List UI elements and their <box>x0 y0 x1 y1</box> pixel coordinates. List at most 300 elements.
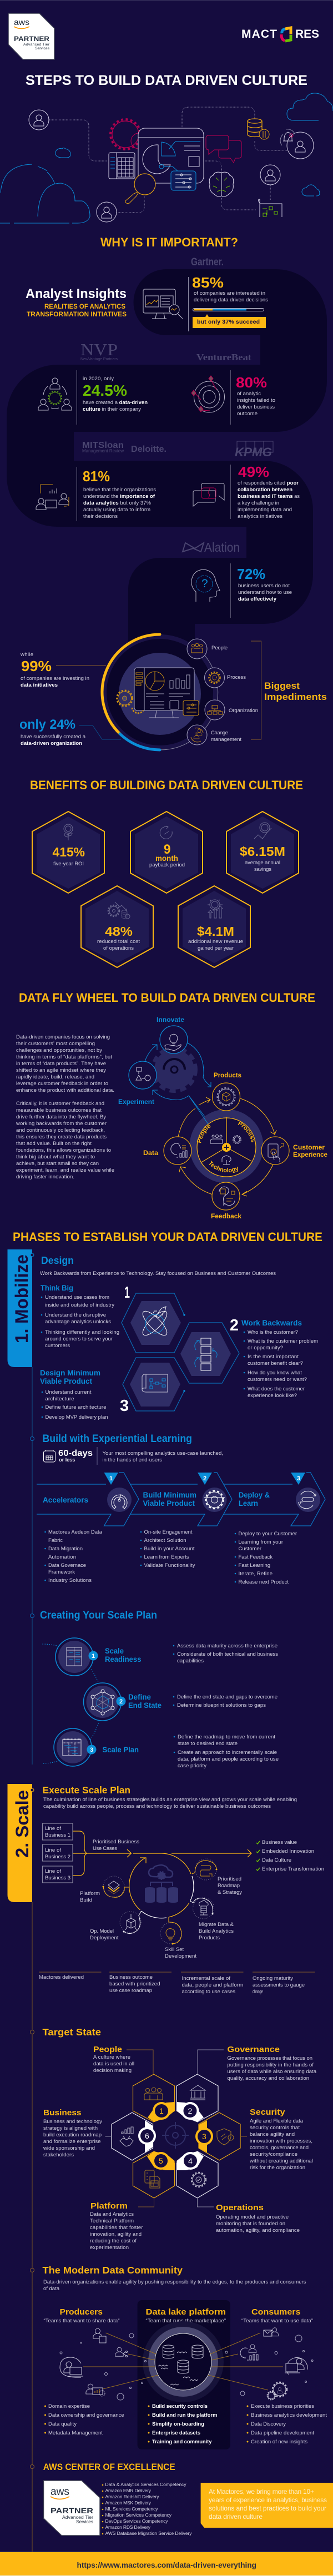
section heading: phases: PHASES TO ESTABLISH YOUR DATA DRIVEN CULTURE <box>13 1230 322 1244</box>
node: customer experience: Customer <box>293 1145 325 1151</box>
consumers column: Business analytics development <box>251 2412 327 2418</box>
work backwards list: Work Backwards <box>241 1319 302 1327</box>
modern data community heading: The Modern Data Community <box>42 2265 183 2276</box>
step 3: scale plan: Create an approach to incrementally scale <box>178 1750 277 1756</box>
icon: analytics monitor <box>134 668 194 718</box>
work backwards list: How do you know what <box>248 1370 302 1376</box>
deliverables row: Incremental scale of <box>182 1975 230 1982</box>
node: op model <box>90 1911 141 1941</box>
producers column: Domain expertise <box>48 2403 90 2409</box>
stat: 80% VentureBeat: deliver business <box>237 404 275 410</box>
node: experiment: Experiment <box>118 1099 154 1106</box>
consumers column: “Teams that want to use data” <box>241 2318 313 2324</box>
accelerators list: Industry Solutions <box>48 1577 92 1584</box>
design heading: Work Backwards from Experience to Technology. Stay focused on Business and Customer Outcomes <box>40 1271 276 1277</box>
step 3: scale plan: state to desired end state <box>178 1741 238 1747</box>
consumers column: Creation of new insights <box>251 2439 307 2445</box>
biggest impediments label: Impediments <box>264 692 327 702</box>
consumers column: Execute business priorities <box>251 2403 314 2409</box>
callout: Mactores experience: years of experience in analytics, business <box>209 2496 327 2504</box>
execute scale plan diagram <box>42 1823 324 1959</box>
benefit: $4.1M revenue <box>178 886 250 967</box>
data lake platform panel: Build security controls <box>152 2403 208 2409</box>
timeline rail: mobilize <box>30 1367 34 1765</box>
stat: 72% Alation: 72% <box>237 566 265 582</box>
fly wheel description text: measurable business outcomes that <box>16 1107 102 1113</box>
heading: build with experiential learning: Build with Experiential Learning <box>42 1433 192 1445</box>
accelerators list: Mactores Aedeon Data <box>48 1529 103 1535</box>
phase tab: 2. Scale <box>8 1784 34 1902</box>
AWS partner badge large <box>43 2481 100 2535</box>
benefit: $6.15M savings: $6.15M <box>240 844 285 859</box>
node: customer experience: Experience <box>293 1152 327 1158</box>
hex 6: business: 6 <box>145 2131 149 2140</box>
accelerators list: Automation <box>48 1554 76 1560</box>
consumers column: Data pipeline development <box>251 2430 314 2436</box>
chevron outlines <box>37 1473 325 1526</box>
AWS competencies list: Amazon EMR Delivery <box>105 2488 152 2493</box>
fly wheel description text: leverage customer feedback in order to <box>16 1081 108 1087</box>
fly wheel description text: think big about what they want to <box>16 1154 95 1160</box>
AWS competencies list <box>102 2482 192 2536</box>
node: migrate data: Migrate Data & <box>199 1922 234 1928</box>
target state: security: innovation with processes, <box>250 2138 312 2144</box>
design MVP list: Viable Product <box>40 1377 92 1385</box>
stat: 81% MIT Sloan: actually using data to inform <box>83 507 150 513</box>
deploy label and loop: Deploy & <box>239 1491 270 1499</box>
fly wheel description text: working backwards from the customer <box>16 1121 107 1127</box>
AWS competencies list: Amazon MSK Delivery <box>105 2500 152 2506</box>
item: process: Process <box>227 674 246 680</box>
node: migrate data <box>190 1898 234 1941</box>
benefit: $4.1M revenue: $4.1M <box>197 924 234 939</box>
stat: 80% VentureBeat <box>191 370 275 425</box>
execute scale plan diagram: Prioritised Business <box>93 1839 139 1845</box>
source logos: KPMG <box>235 445 272 459</box>
accelerators label and gauge: Accelerators <box>43 1496 88 1504</box>
icons in wheel segments <box>210 1135 241 1165</box>
target state: governance: Governance <box>228 2045 280 2054</box>
phase tab: 1. Mobilize: 1. Mobilize <box>12 1254 32 1343</box>
design heading: Design <box>41 1255 74 1266</box>
target state: governance: quality, accuracy and collaboration <box>228 2075 309 2081</box>
node: products <box>212 1072 241 1111</box>
stat: 81% MIT Sloan: their decisions <box>83 513 118 520</box>
stat: 49% KPMG: a key challenge in <box>238 500 279 506</box>
deploy list: Release next Product <box>239 1579 289 1585</box>
line of business boxes: Line of <box>45 1868 61 1874</box>
inner hexes <box>130 1301 181 1345</box>
design heading <box>40 1255 276 1277</box>
think big list <box>41 1284 119 1349</box>
benefit: 48% reduced cost: reduced total cost <box>97 939 140 945</box>
target state: business: wide sponsorship and <box>43 2145 95 2151</box>
fly wheel description text: their customers’ most compelling <box>16 1041 95 1047</box>
icon: team around gear <box>38 378 72 410</box>
callout <box>193 314 266 328</box>
producers column: Data ownership and governance <box>48 2412 124 2418</box>
stat: 99% investing: data initiatives <box>21 682 58 688</box>
fly wheel diagram <box>118 1017 327 1220</box>
hex 6: business <box>112 2113 156 2160</box>
heading: target state: Target State <box>42 2026 101 2038</box>
target state: operations: Operations <box>216 2203 264 2212</box>
think big list: advantage analytics unlocks <box>45 1319 111 1325</box>
progress bar <box>193 309 264 311</box>
item: organization: Organization <box>229 708 258 714</box>
outcomes checklist <box>256 1839 324 1872</box>
connectors <box>83 2333 158 2389</box>
icon: user circles <box>29 110 314 222</box>
stat: 24.5% NVP: have created a data-driven <box>83 400 148 406</box>
execute scale plan heading: The culmination of line of business strategies builds an enterprise view and grows your scale while enabling <box>43 1797 297 1803</box>
node: migrate data: Products <box>199 1935 220 1941</box>
benefit: 48% reduced cost: of operations <box>103 945 134 951</box>
step 2: define end state <box>83 1683 278 1721</box>
step 1: scale readiness: Assess data maturity across the enterprise <box>177 1643 278 1649</box>
deploy list: Learning from your <box>239 1539 283 1545</box>
benefit: 9 month payback: payback period <box>149 862 185 868</box>
stat: only 24%: have successfully created a <box>21 734 86 740</box>
amber and blue progress arcs <box>102 634 218 750</box>
benefit: $4.1M revenue: additional new revenue <box>188 939 243 945</box>
icon: amber gears <box>117 690 143 713</box>
node: prioritised roadmap: Prioritised <box>218 1876 241 1882</box>
node: platform build <box>80 1876 129 1903</box>
icon: calendar <box>43 1450 56 1462</box>
target state: governance: users of data while also ensuring data <box>228 2069 317 2075</box>
deploy list: Iterate, Refine <box>239 1571 273 1577</box>
deliverables row: data, people and platform <box>182 1982 243 1988</box>
line of business boxes: Business 1 <box>45 1832 70 1838</box>
target state: business: Business <box>43 2108 81 2118</box>
step 2: define end state: End State <box>128 1701 162 1710</box>
icons <box>60 2328 128 2396</box>
execute scale plan heading: capability build across people, process and technology to deliver sustainable business outcomes <box>43 1803 271 1809</box>
build MVP list: Build in your Account <box>144 1546 195 1552</box>
section heading: fly wheel: DATA FLY WHEEL TO BUILD DATA DRIVEN CULTURE <box>19 991 315 1005</box>
target state: business: Business and technology <box>43 2119 102 2125</box>
circular dashboard diagram <box>102 634 261 750</box>
deliverables row: Ongoing maturity <box>253 1975 293 1982</box>
step 2: define end state: Determine blueprint solutions to gaps <box>177 1702 266 1708</box>
AWS competencies list: Migration Services Competency <box>105 2512 172 2518</box>
node: skill set: Development <box>165 1953 196 1959</box>
stat: 81% MIT Sloan: believe that their organizations <box>83 487 156 493</box>
data lake platform panel <box>138 2300 230 2449</box>
icon: slider box <box>183 700 199 715</box>
stat: 81% MIT Sloan: data analytics but only 37% <box>83 500 152 506</box>
stat: 72% Alation: understand how to use <box>238 589 292 596</box>
think big list: Think Big <box>41 1284 73 1292</box>
hexagon outline <box>122 1293 239 1411</box>
outer ring background <box>102 634 218 750</box>
deploy list: Deploy to your Customer <box>239 1531 297 1537</box>
item: change management: Change <box>211 730 228 736</box>
benefit: 9 month payback: 9 <box>164 842 171 857</box>
list <box>148 2406 150 2442</box>
outcomes checklist: Data Culture <box>262 1857 291 1863</box>
stat: only 24%: data-driven organization <box>21 740 82 747</box>
data lake platform panel: Training and community <box>152 2439 212 2445</box>
stat: 24.5% NVP <box>38 370 148 425</box>
heading: AWS center of excellence: AWS CENTER OF EXCELLENCE <box>43 2462 175 2472</box>
node: platform build: Platform <box>80 1891 100 1897</box>
callout: Mactores experience: data driven culture <box>209 2513 263 2520</box>
list <box>44 2406 46 2433</box>
hero illustration: connected data network <box>0 93 333 223</box>
target state: platform: capabilities that foster <box>90 2225 143 2231</box>
accelerators list: Data Migration <box>48 1546 83 1552</box>
icon: blueprint <box>259 199 282 217</box>
60-days note <box>43 1447 223 1465</box>
stat: 85% gartner: 85% <box>192 274 224 291</box>
think big list: inside and outside of industry <box>45 1302 114 1308</box>
stat: 80% VentureBeat: outcome <box>237 411 258 417</box>
hex 3: security: 3 <box>202 2132 206 2141</box>
target state: business: strategy is aligned with <box>43 2125 98 2131</box>
producers column: Data quality <box>48 2421 77 2427</box>
step 1: scale readiness: capabilities <box>177 1658 204 1664</box>
deploy list: Fast Learning <box>239 1562 270 1569</box>
stat: 49% KPMG: 49% <box>238 463 269 480</box>
deploy list <box>235 1531 297 1585</box>
icon: brain <box>209 172 234 196</box>
benefit: $6.15M savings: average annual <box>245 860 280 866</box>
fly wheel description text: this ensures they create data products <box>16 1134 107 1140</box>
accelerators list <box>44 1529 103 1584</box>
stat: 49% KPMG: implementing data and <box>238 507 292 513</box>
stat: 49% KPMG: collaboration between <box>238 487 292 493</box>
step 3: scale plan <box>54 1728 279 1769</box>
target state: platform: Data and Analytics <box>90 2211 134 2217</box>
AWS partner badge large: PARTNER <box>51 2507 93 2515</box>
execute scale plan heading: Execute Scale Plan <box>42 1784 130 1796</box>
hex 5: platform <box>133 2151 175 2198</box>
target state: business: stakeholders <box>43 2152 74 2158</box>
stat: 49% KPMG <box>193 463 300 520</box>
think big list: Thinking differently and looking <box>45 1329 119 1335</box>
stat: 80% VentureBeat: insights failed to <box>237 397 275 404</box>
icon: broken chat bubbles <box>193 483 224 506</box>
stat: 72% Alation: ? <box>201 577 208 590</box>
outcomes checklist: Business value <box>262 1839 297 1846</box>
target state: business <box>43 2108 102 2158</box>
hex 1: people: 1 <box>159 2106 164 2115</box>
target state: people: People <box>93 2045 122 2054</box>
think big list: Understand the disruptive <box>45 1312 106 1318</box>
icon: magnifier <box>125 174 155 203</box>
center gear <box>153 1048 195 1091</box>
stat: 99% investing: 99% <box>21 658 52 674</box>
Mactores logo: RES <box>295 28 319 41</box>
deliverables row: assessments to gauge <box>253 1982 305 1988</box>
target state: security: controls, governance and <box>250 2145 309 2151</box>
target state: platform: reducing the cost of <box>90 2238 137 2244</box>
modern data community heading <box>42 2265 306 2292</box>
step 1: scale readiness: Scale <box>105 1647 124 1655</box>
benefit: 48% reduced cost <box>81 886 153 967</box>
stat: 80% VentureBeat: 80% <box>236 374 267 391</box>
build MVP list <box>140 1529 195 1569</box>
work backwards list: customers need or want? <box>248 1377 307 1383</box>
build MVP list: Validate Functionality <box>144 1562 195 1569</box>
analyst insights intro <box>26 286 127 318</box>
step 3: scale plan: case priority <box>178 1763 206 1769</box>
data lake platform panel: Data lake platform <box>145 2307 226 2317</box>
node: products: Products <box>214 1072 241 1079</box>
fly wheel description text: rapidly ideate, build, release, and <box>16 1074 94 1080</box>
stat: 49% KPMG: business and IT teams as <box>238 493 300 500</box>
design MVP list <box>40 1369 108 1420</box>
modern data community heading: of data <box>43 2286 60 2292</box>
target state: people: data is used in all <box>93 2061 134 2067</box>
chevrons: accelerators / build / deploy: 1 <box>109 1475 113 1482</box>
node: op model: Deployment <box>90 1935 119 1941</box>
target state: platform: Platform <box>90 2201 128 2211</box>
target state: platform: innovation, agility and <box>90 2231 142 2237</box>
icon: monitor with magnifier <box>143 289 183 319</box>
biggest impediments label: Biggest <box>264 680 300 691</box>
icon: databases <box>158 2345 203 2385</box>
consumers column: Data Discovery <box>251 2421 286 2427</box>
item: organization <box>205 700 258 720</box>
deliverables row: based with prioritized <box>109 1981 160 1987</box>
target state: people <box>93 2045 134 2074</box>
stat: only 24%: only 24% <box>19 717 75 732</box>
Mactores logo: MACT <box>241 28 277 41</box>
heading: creating your scale plan: Creating Your Scale Plan <box>40 1610 157 1621</box>
dotted connectors <box>42 1644 99 1763</box>
stat: 49% KPMG: of respondents cited poor <box>238 480 299 486</box>
target state: security <box>249 2108 313 2171</box>
target state: governance: putting responsibility in the hands of <box>228 2062 314 2068</box>
stat: 72% Alation: business users do not <box>238 583 290 589</box>
fly wheel diagram: Technology <box>209 1160 238 1173</box>
step 1: scale readiness <box>56 1638 278 1676</box>
stat: 85% gartner: of companies are interested in <box>194 290 265 296</box>
item: change management <box>187 725 241 745</box>
AWS competencies list: Amazon RDS Delivery <box>105 2524 151 2530</box>
data lake platform panel: Build and run the platform <box>152 2412 218 2418</box>
step 2: define end state: 2 <box>119 1698 123 1705</box>
icon: chat bubbles <box>206 135 241 163</box>
header: AWS partner badge <box>8 13 54 59</box>
node: prioritised roadmap: Roadmap <box>218 1883 240 1889</box>
stat: 81% MIT Sloan <box>36 467 156 521</box>
icon: people with charts <box>36 485 69 510</box>
node: experiment <box>118 1061 157 1106</box>
bracket <box>251 641 261 739</box>
target state: people: A culture where <box>93 2054 130 2060</box>
design MVP list: Define future architecture <box>46 1404 107 1410</box>
work backwards list: experience look like? <box>248 1393 297 1399</box>
stat: 24.5% NVP: in 2020, only <box>83 376 114 382</box>
fly wheel description text: and continuously collecting feedback, <box>16 1127 105 1133</box>
step 3: scale plan: 3 <box>90 1747 93 1753</box>
stat: 24.5% NVP: culture in their company <box>83 406 141 412</box>
producers column: Metadata Management <box>48 2430 103 2436</box>
hex 4: operations <box>176 2151 218 2198</box>
chevrons: accelerators / build / deploy: 3 <box>297 1475 300 1482</box>
build MVP label and gear <box>143 1488 226 1512</box>
hexagon process: three steps <box>120 1284 239 1415</box>
work backwards list: or opportunity? <box>248 1345 283 1351</box>
benefit: $6.15M savings: savings <box>254 866 271 873</box>
scale plan steps <box>42 1638 279 1769</box>
callout: Mactores experience <box>201 2483 333 2528</box>
Mactores logo <box>241 28 319 41</box>
target state: security: security/compliance <box>250 2151 297 2157</box>
producers column <box>43 2307 158 2436</box>
step 2: define end state: Define <box>128 1693 151 1701</box>
hex 1: people <box>133 2074 175 2122</box>
target state: security: risk for the organization <box>250 2165 305 2171</box>
decorative bubbles <box>225 2335 313 2396</box>
header: AWS partner badge: aws <box>14 18 29 27</box>
icon: gear and falling trend <box>108 902 130 919</box>
accelerators label and gauge <box>43 1488 132 1512</box>
icon: rocket orbit <box>139 1307 170 1339</box>
icon: target with darts <box>191 376 224 412</box>
target state: platform <box>90 2201 143 2251</box>
target state: operations: monitoring that is founded on <box>216 2221 285 2227</box>
stat: 85% gartner <box>143 274 268 331</box>
target state: security: Security <box>250 2108 285 2117</box>
execute scale plan diagram: Use Cases <box>93 1846 117 1852</box>
item: people: People <box>211 645 228 651</box>
icon: head with question mark <box>191 569 220 602</box>
build MVP list: On-site Engagement <box>144 1529 193 1535</box>
icon: dashboard window <box>138 128 204 183</box>
node: feedback <box>211 1182 242 1220</box>
deliverables row: Business outcome <box>109 1974 153 1980</box>
work backwards list: Is the most important <box>248 1354 299 1360</box>
target state: security: without creating additional <box>249 2158 313 2164</box>
fly wheel description text: thinking in terms of “data platforms”, but <box>16 1054 112 1060</box>
line of business boxes: Business 3 <box>45 1875 70 1881</box>
line of business boxes: Business 2 <box>45 1854 70 1860</box>
think big list: customers <box>45 1343 70 1349</box>
target state: operations: Operating model and proactive <box>216 2214 289 2220</box>
fly wheel diagram: Process <box>238 1121 254 1142</box>
section heading: why is it important: WHY IS IT IMPORTANT? <box>100 235 238 249</box>
fly wheel description text: Critically, it is customer feedback and <box>16 1101 104 1107</box>
chevrons: accelerators / build / deploy: 2 <box>203 1475 206 1482</box>
list <box>246 2406 249 2442</box>
connector leaders <box>105 2050 247 2207</box>
design MVP list: Understand current <box>46 1389 92 1395</box>
node: prioritised roadmap: & Strategy <box>218 1889 242 1896</box>
phase tab: 2. Scale: 2. Scale <box>12 1790 32 1858</box>
target state: business: and formalize enterprise <box>43 2139 101 2145</box>
benefit: 415% ROI: 415% <box>52 845 85 859</box>
center target icon <box>162 2122 189 2149</box>
phase tab: 1. Mobilize <box>8 1249 34 1367</box>
analyst insights intro: TRANSFORMATION INTIATIVES <box>27 310 127 318</box>
consumers column <box>208 2307 327 2445</box>
curved labels <box>201 1123 218 1143</box>
work backwards list: What does the customer <box>248 1386 305 1392</box>
step numbers: 1 <box>124 1284 130 1302</box>
line of business boxes: Line of <box>45 1847 61 1853</box>
benefit: $6.15M savings <box>226 811 299 893</box>
header: AWS partner badge: Services <box>35 47 50 51</box>
stat: only 24% <box>19 717 121 747</box>
target state: business: build execution roadmap <box>43 2132 102 2138</box>
icon: cloud and databases <box>145 1865 178 1903</box>
AWS competencies list: Amazon Redshift Delivery <box>105 2494 159 2499</box>
